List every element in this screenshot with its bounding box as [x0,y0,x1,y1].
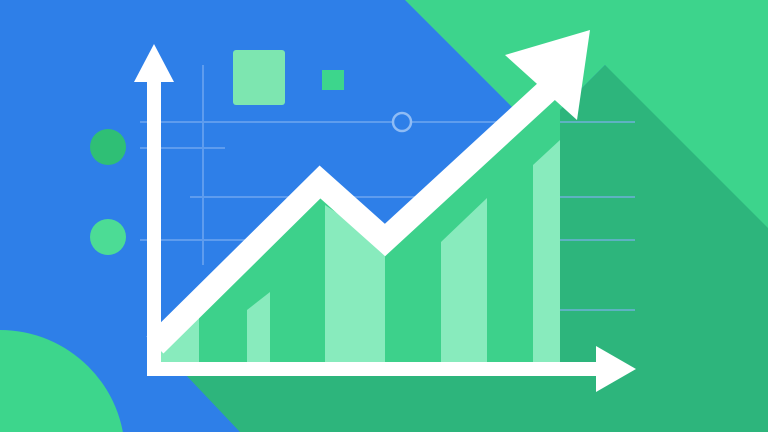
background green top-right [405,0,768,240]
grid lines [140,65,635,310]
y axis [134,44,174,374]
grid marker circle [393,113,411,131]
trend arrow [155,30,590,345]
icon: large square [233,50,285,105]
bar chart [158,140,560,362]
decorative circle bottom left [0,330,125,432]
icon: dot 2 [90,219,126,255]
icon: dot 1 [90,129,126,165]
shadow region [185,65,768,432]
icon: small square [322,70,344,90]
chart area fill [158,95,560,362]
x axis [147,346,636,392]
